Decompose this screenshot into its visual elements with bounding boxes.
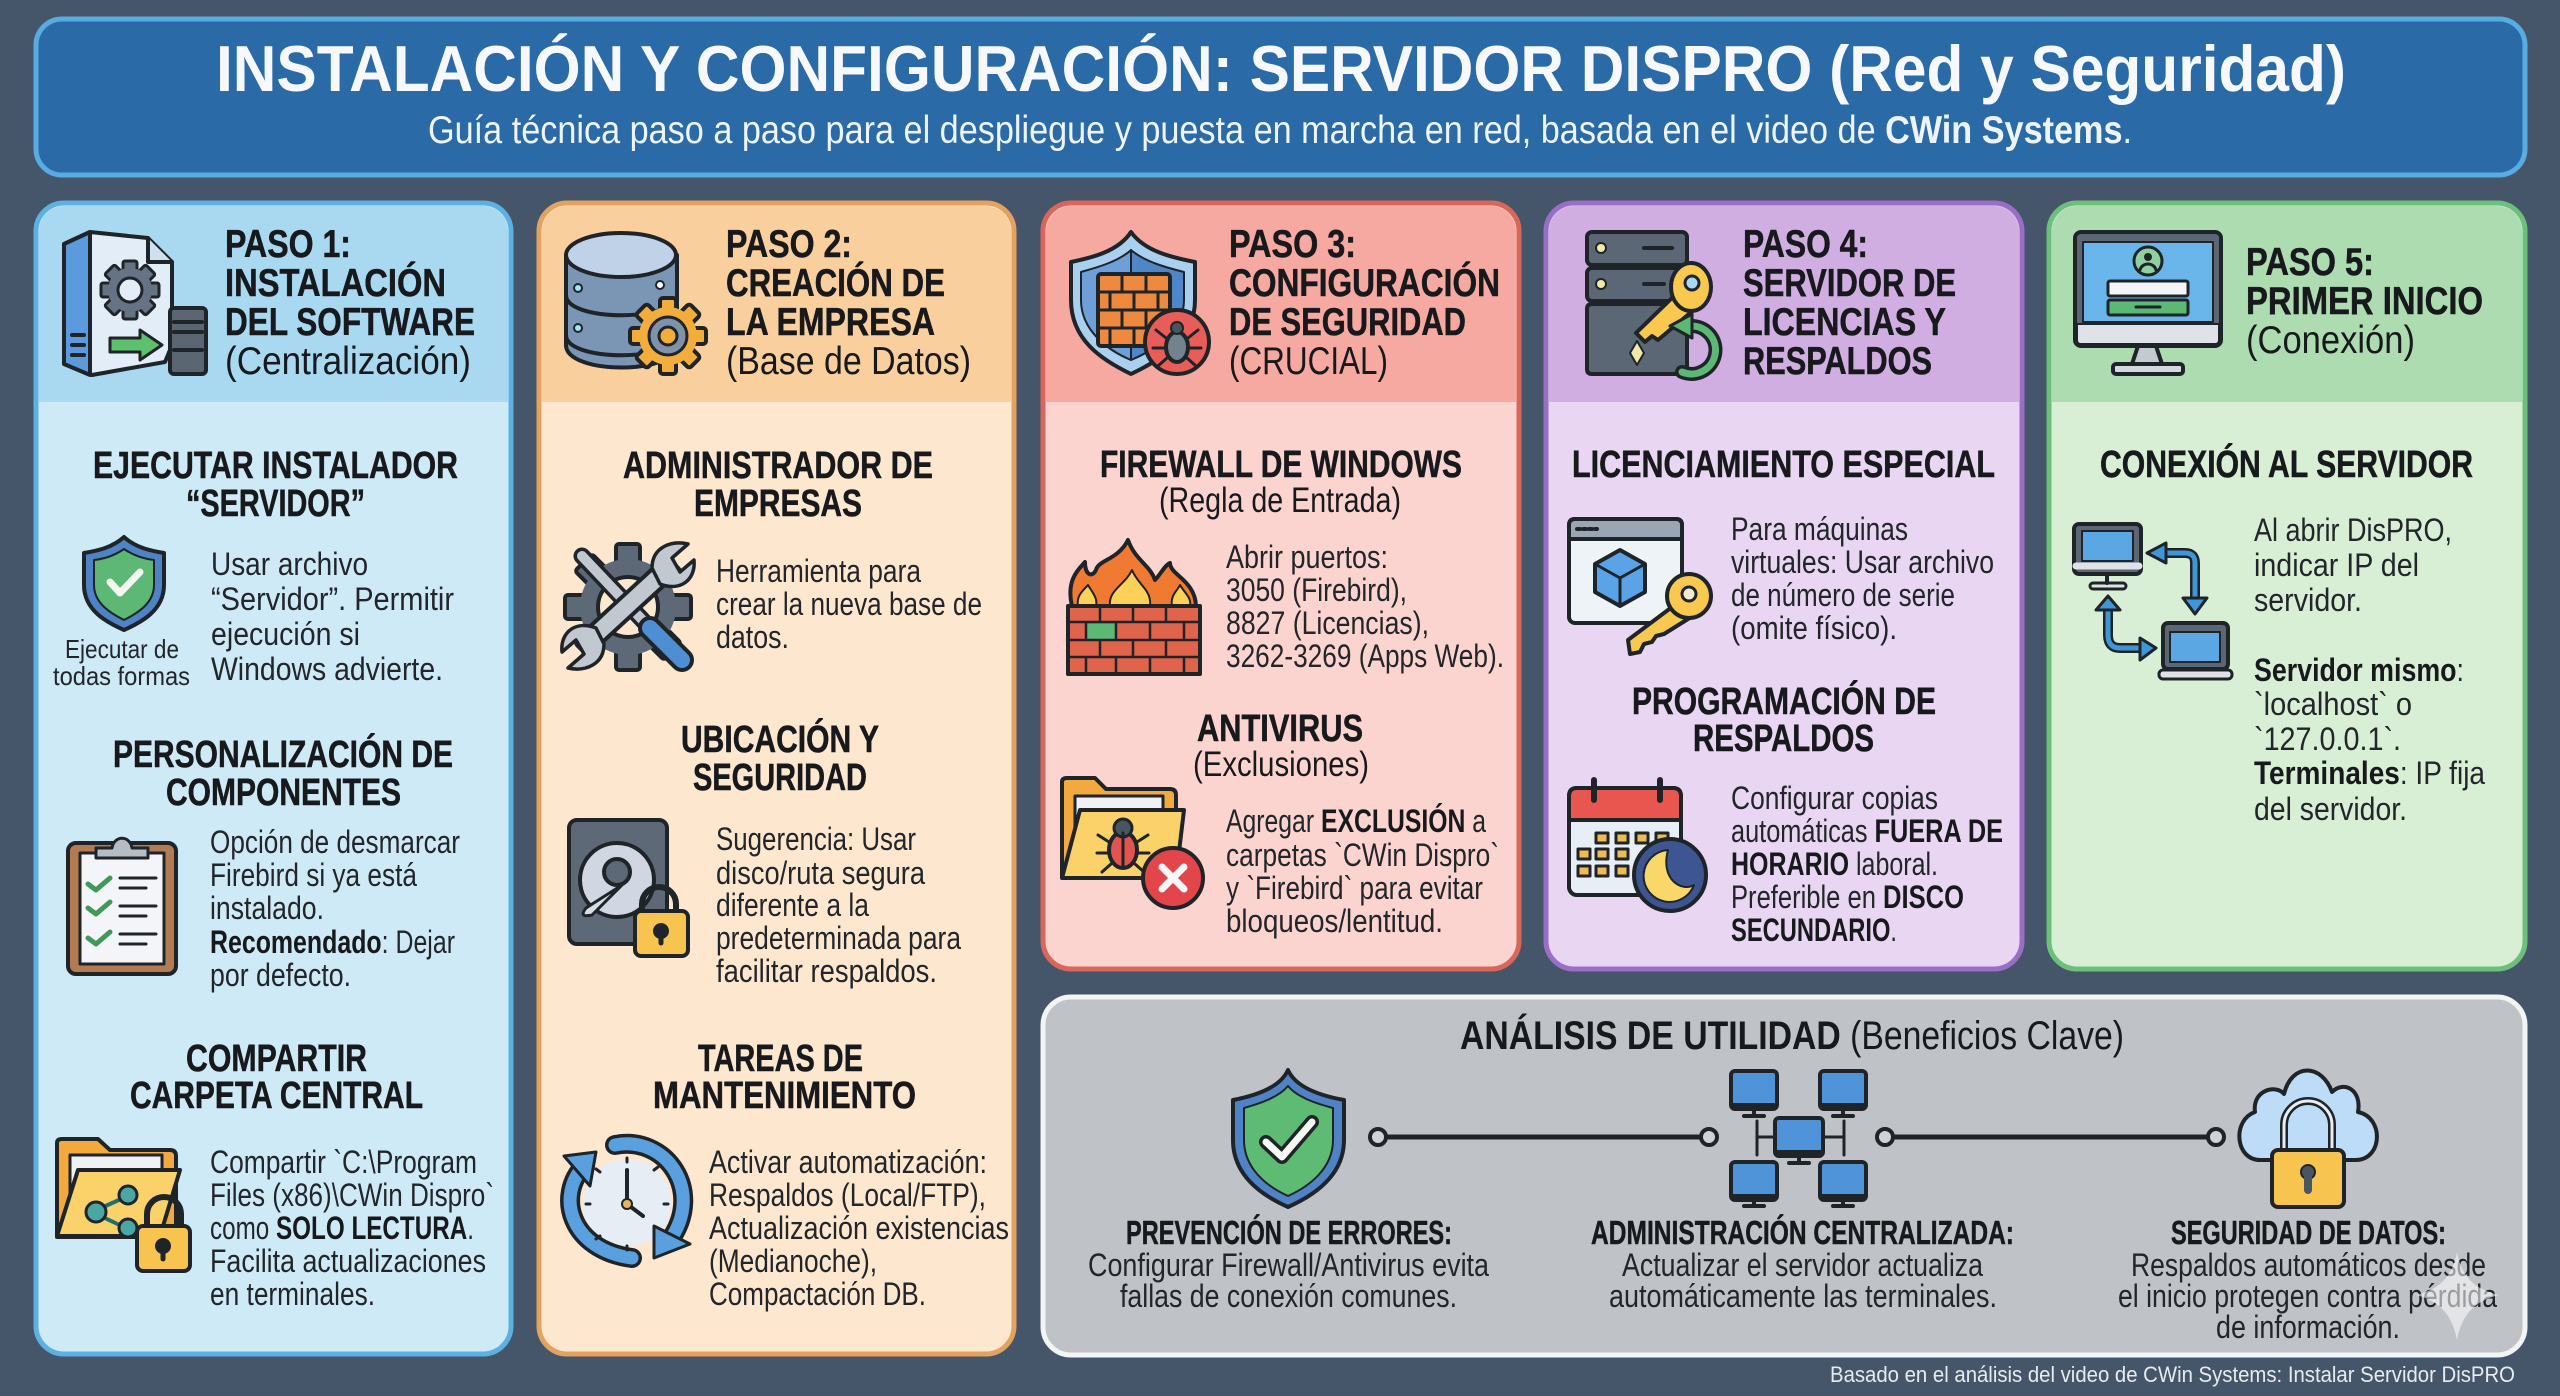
text: seguridad de datos	[2118, 1214, 2497, 1345]
section heading: firewall	[1100, 444, 1462, 520]
footer source note: Basado en el análisis del video de CWin Systems: Instalar Servidor DisPRO	[1830, 1362, 2515, 1387]
text: maquinas virtuales	[1731, 511, 1994, 646]
heading: paso 3	[1229, 223, 1500, 383]
title: INSTALACIÓN Y CONFIGURACIÓN: SERVIDOR DISPRO (Red y Seguridad)	[216, 32, 2346, 105]
section heading: firewall: FIREWALL DE WINDOWS	[1100, 444, 1462, 486]
text: activar automatizacion: Actualización existencias	[709, 1210, 1009, 1246]
section heading: administrador	[623, 445, 933, 525]
text: usar archivo: ejecución si	[211, 616, 360, 652]
text: administracion centralizada: Actualizar el servidor actualiza	[1622, 1247, 1983, 1283]
text: sugerencia: Sugerencia: Usar	[716, 821, 916, 857]
text: opcion de desmarcar: Firebird si ya está	[210, 857, 417, 893]
icon: calendar with moon	[1569, 780, 1706, 911]
section heading: ejecutar instalador: “SERVIDOR”	[186, 483, 365, 525]
icon: gear and tools	[562, 543, 694, 670]
section heading: personalizacion	[113, 732, 453, 814]
icon: shared folder with lock	[57, 1139, 190, 1271]
heading: paso 1	[225, 223, 475, 383]
text: exclusion: Agregar EXCLUSIÓN a	[1226, 803, 1486, 839]
section heading: ubicacion: SEGURIDAD	[693, 757, 867, 799]
section heading: administrador: ADMINISTRADOR DE	[623, 445, 933, 487]
icon: database with gear	[566, 233, 706, 374]
icon: shield firewall with bug	[1071, 232, 1209, 374]
section heading: administrador: EMPRESAS	[694, 483, 862, 525]
text: activar automatizacion: (Medianoche),	[709, 1243, 877, 1279]
section heading: firewall: (Regla de Entrada)	[1159, 481, 1401, 520]
section heading: personalizacion: PERSONALIZACIÓN DE	[113, 732, 453, 776]
text: opcion de desmarcar: Recomendado: Dejar	[210, 924, 455, 960]
text: seguridad de datos: de información.	[2216, 1309, 2400, 1345]
text: compartir ruta: Facilita actualizaciones	[210, 1243, 486, 1279]
section heading: programacion	[1632, 679, 1936, 760]
text: configurar copias: HORARIO laboral.	[1731, 846, 1938, 882]
section heading: antivirus: ANTIVIRUS	[1197, 708, 1363, 750]
title banner	[36, 19, 2525, 175]
section heading: licenciamiento: LICENCIAMIENTO ESPECIAL	[1572, 444, 1995, 486]
text: abrir puertos: 3050 (Firebird),	[1226, 572, 1407, 608]
heading: paso 4: LICENCIAS Y	[1743, 301, 1946, 344]
text: activar automatizacion: Activar automatización:	[709, 1144, 987, 1180]
text: conexion detalle: `127.0.0.1`.	[2254, 721, 2401, 757]
text: administracion centralizada: ADMINISTRACIÓN CENTRALIZADA:	[1591, 1214, 2014, 1251]
text: exclusion: carpetas `CWin Dispro`	[1226, 837, 1499, 873]
text: abrir puertos: 3262-3269 (Apps Web).	[1226, 638, 1504, 674]
text: herramienta: datos.	[716, 619, 789, 655]
text: sugerencia	[716, 821, 961, 989]
text: opcion de desmarcar: Opción de desmarcar	[210, 824, 460, 860]
text: exclusion: bloqueos/lentitud.	[1226, 903, 1443, 939]
section heading: compartir carpeta	[130, 1038, 423, 1117]
icon: sparkle watermark	[2416, 1252, 2499, 1340]
panel: paso 1	[36, 203, 511, 1354]
heading: paso 4: RESPALDOS	[1743, 340, 1932, 383]
heading: paso 1: (Centralización)	[225, 340, 471, 383]
text: compartir ruta: Files (x86)\CWin Dispro`	[210, 1177, 494, 1213]
heading: paso 4	[1743, 223, 1956, 383]
connector line	[1370, 1129, 1717, 1145]
icon: shield check	[84, 537, 164, 630]
heading: paso 2: LA EMPRESA	[726, 301, 935, 344]
heading: paso 3: PASO 3:	[1229, 223, 1356, 266]
text: configurar copias: Preferible en DISCO	[1731, 879, 1964, 915]
section heading: ejecutar instalador: EJECUTAR INSTALADOR	[93, 445, 458, 487]
icon: clock with cycle arrows	[564, 1144, 690, 1258]
text: sugerencia: facilitar respaldos.	[716, 953, 937, 989]
text: activar automatizacion: Respaldos (Local/FTP),	[709, 1177, 986, 1213]
text: configurar copias	[1731, 780, 2003, 948]
heading: paso 4: PASO 4:	[1743, 223, 1868, 266]
section heading: compartir carpeta: CARPETA CENTRAL	[130, 1075, 423, 1117]
text: configurar copias: SECUNDARIO.	[1731, 912, 1897, 948]
text: usar archivo: “Servidor”. Permitir	[211, 581, 454, 617]
text: opcion de desmarcar: instalado.	[210, 890, 324, 926]
icon: virtual machine window and key	[1569, 519, 1711, 654]
text: sugerencia: disco/ruta segura	[716, 855, 925, 891]
text: conexion detalle: del servidor.	[2254, 791, 2407, 827]
icon: green shield	[1233, 1070, 1344, 1207]
heading: paso 4: SERVIDOR DE	[1743, 262, 1956, 305]
section heading: personalizacion: COMPONENTES	[166, 772, 401, 814]
heading: paso 1: INSTALACIÓN	[225, 261, 446, 305]
heading: paso 1: DEL SOFTWARE	[225, 301, 475, 344]
section heading: programacion: PROGRAMACIÓN DE	[1632, 679, 1936, 723]
heading: paso 3: (CRUCIAL)	[1229, 340, 1388, 383]
icon: clipboard checklist	[68, 838, 176, 974]
text: compartir ruta	[210, 1144, 494, 1312]
text: herramienta: Herramienta para	[716, 553, 921, 589]
text: maquinas virtuales: de número de serie	[1731, 577, 1955, 613]
text: prevencion de errores: fallas de conexión comunes.	[1120, 1278, 1457, 1314]
text: seguridad de datos: Respaldos automáticos desde	[2131, 1247, 2486, 1283]
panel: paso 2	[539, 203, 1014, 1354]
section heading: tareas: TAREAS DE	[698, 1038, 863, 1080]
text: seguridad de datos: SEGURIDAD DE DATOS:	[2171, 1214, 2446, 1251]
text: configurar copias: automáticas FUERA DE	[1731, 813, 2003, 849]
text: compartir ruta: en terminales.	[210, 1276, 375, 1312]
section heading: tareas	[653, 1038, 916, 1117]
text: conexion detalle: Servidor mismo:	[2254, 652, 2464, 688]
section heading: ubicacion: UBICACIÓN Y	[681, 717, 879, 761]
caption: ejecutar de todas formas: Ejecutar de	[65, 634, 179, 664]
caption: ejecutar de todas formas: todas formas	[53, 661, 190, 691]
heading: paso 2: CREACIÓN DE	[726, 261, 945, 305]
text: configurar copias: Configurar copias	[1731, 780, 1938, 816]
text: conexion detalle: Al abrir DisPRO,	[2254, 512, 2452, 548]
text: maquinas virtuales: (omite físico).	[1731, 610, 1897, 646]
connector line	[1877, 1129, 2224, 1145]
section heading: antivirus: (Exclusiones)	[1193, 745, 1369, 784]
text: activar automatizacion: Compactación DB.	[709, 1276, 926, 1312]
icon: centralized network	[1731, 1071, 1866, 1206]
text: conexion detalle: Terminales: IP fija	[2254, 755, 2485, 791]
text: prevencion de errores: Configurar Firewall/Antivirus evita	[1088, 1247, 1489, 1283]
icon: brick wall with flames	[1068, 540, 1200, 674]
text: compartir ruta: Compartir `C:\Program	[210, 1144, 477, 1180]
text: abrir puertos: Abrir puertos:	[1226, 539, 1388, 575]
text: seguridad de datos: el inicio protegen contra pérdida	[2118, 1278, 2497, 1314]
text: sugerencia: predeterminada para	[716, 920, 961, 956]
heading: paso 2: (Base de Datos)	[726, 340, 971, 383]
heading: paso 5: PASO 5:	[2246, 241, 2374, 284]
heading: paso 2: PASO 2:	[726, 223, 852, 266]
panel: paso 5	[2049, 203, 2525, 969]
icon: hard disk with lock	[569, 820, 688, 956]
section heading: compartir carpeta: COMPARTIR	[186, 1038, 367, 1080]
text: usar archivo	[211, 546, 454, 687]
icon: monitor laptop connection	[2074, 524, 2232, 679]
text: prevencion de errores	[1088, 1214, 1489, 1314]
text: sugerencia: diferente a la	[716, 887, 869, 923]
text: compartir ruta: como SOLO LECTURA.	[210, 1210, 474, 1246]
panel: paso 4	[1546, 203, 2022, 969]
section heading: ubicacion	[681, 717, 879, 799]
caption: ejecutar de todas formas	[53, 634, 190, 691]
text: conexion detalle	[2254, 512, 2485, 827]
heading: paso 1: PASO 1:	[225, 223, 351, 266]
text: exclusion	[1226, 803, 1499, 939]
text: administracion centralizada	[1591, 1214, 2014, 1314]
text: abrir puertos: 8827 (Licencias),	[1226, 605, 1429, 641]
panel: paso 3	[1043, 203, 1519, 969]
text: maquinas virtuales: virtuales: Usar archivo	[1731, 544, 1994, 580]
heading: paso 5	[2246, 241, 2483, 362]
heading: paso 3: DE SEGURIDAD	[1229, 301, 1466, 344]
text: herramienta: crear la nueva base de	[716, 586, 982, 622]
icon: folder with bug and x	[1062, 778, 1203, 908]
section heading: ejecutar instalador	[93, 445, 458, 525]
section heading: conexion: CONEXIÓN AL SERVIDOR	[2100, 442, 2473, 486]
section heading: programacion: RESPALDOS	[1693, 718, 1874, 760]
text: administracion centralizada: automáticamente las terminales.	[1609, 1278, 1997, 1314]
text: usar archivo: Windows advierte.	[211, 651, 443, 687]
text: conexion detalle: indicar IP del	[2254, 547, 2419, 583]
subtitle: Guía técnica paso a paso para el despliegue y puesta en marcha en red, basada en el video de CWin Systems.	[428, 109, 2132, 152]
text: maquinas virtuales: Para máquinas	[1731, 511, 1908, 547]
text: conexion detalle: servidor.	[2254, 582, 2362, 618]
text: exclusion: y `Firebird` para evitar	[1226, 870, 1483, 906]
section heading: tareas: MANTENIMIENTO	[653, 1075, 916, 1117]
text: herramienta	[716, 553, 982, 655]
text: abrir puertos	[1226, 539, 1504, 674]
text: opcion de desmarcar	[210, 824, 460, 993]
heading: paso 3: CONFIGURACIÓN	[1229, 261, 1500, 305]
text: activar automatizacion	[709, 1144, 1009, 1312]
text: usar archivo: Usar archivo	[211, 546, 368, 582]
heading: paso 5: (Conexión)	[2246, 319, 2415, 362]
icon: monitor login	[2075, 232, 2221, 374]
section heading: antivirus	[1193, 708, 1369, 784]
icon: installer to server	[64, 232, 206, 375]
text: opcion de desmarcar: por defecto.	[210, 957, 351, 993]
heading: analisis: ANÁLISIS DE UTILIDAD (Beneficios Clave)	[1460, 1013, 2124, 1058]
icon: server key and backup	[1587, 232, 1715, 374]
heading: paso 5: PRIMER INICIO	[2246, 280, 2483, 323]
panel: analisis de utilidad	[1043, 997, 2525, 1355]
heading: paso 2	[726, 223, 971, 383]
text: conexion detalle: `localhost` o	[2254, 686, 2412, 722]
icon: cloud and padlock	[2239, 1070, 2377, 1207]
text: prevencion de errores: PREVENCIÓN DE ERRORES:	[1126, 1214, 1452, 1251]
